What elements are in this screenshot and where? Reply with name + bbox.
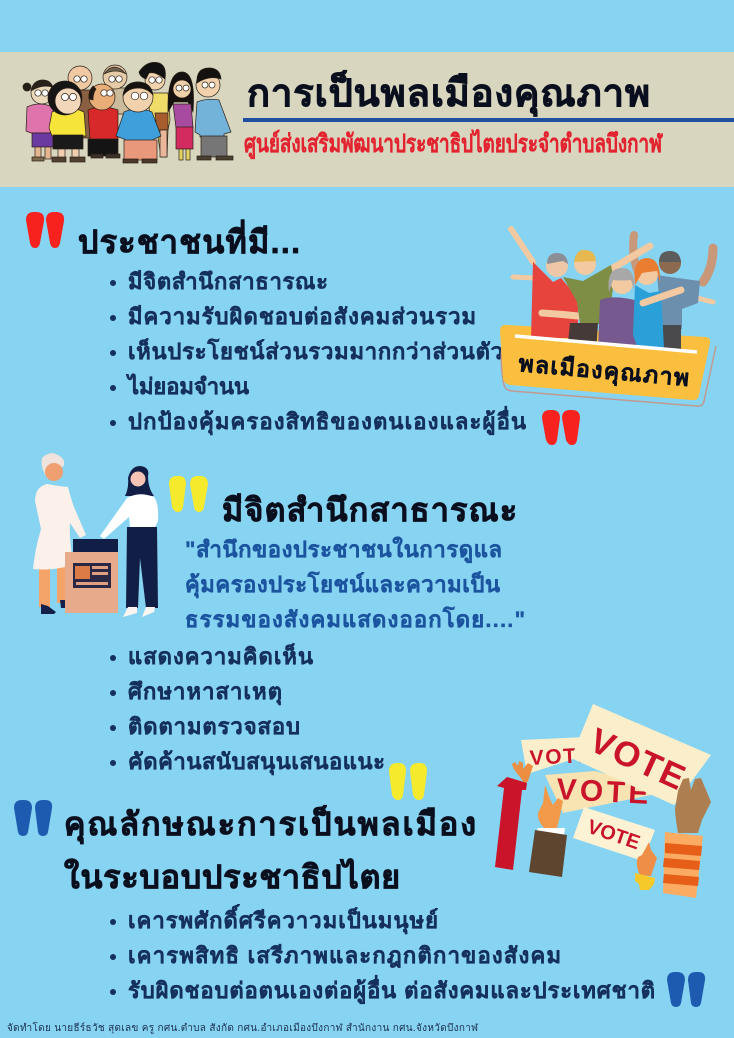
- sign lower cover: [502, 335, 697, 400]
- icon: yellow quote mark closing: [389, 763, 427, 800]
- middle back sign: [545, 771, 670, 813]
- list: expression: ติดตามตรวจสอบ: [128, 714, 300, 739]
- list: traits: เคารพศักดิ์ศรีควาวมเป็นมนุษย์: [128, 904, 438, 935]
- list: expression: คัดค้านสนับสนุนเสนอแนะ: [128, 749, 385, 776]
- icon: red quote mark top: [26, 212, 64, 248]
- left back sign: [521, 737, 586, 774]
- list: citizen qualities: ปกป้องคุ้มครองสิทธิของตนเองและผู้อื่น: [128, 405, 526, 436]
- icon: vote signs and hands: VOTE: [584, 721, 691, 798]
- title: การเป็นพลเมืองคุณภาพ: [247, 70, 650, 117]
- icon: vote signs and hands: VOTE: [556, 773, 649, 811]
- icon: vote signs and hands: VOTE: [584, 816, 643, 854]
- list: expression: [110, 642, 385, 776]
- list: citizen qualities: มีจิตสำนึกสาธารณะ: [128, 269, 328, 294]
- quote text: ธรรมของสังคมแสดงออกโดย....": [185, 606, 525, 632]
- header banner: [0, 52, 734, 187]
- heading: public consciousness: มีจิตสำนึกสาธารณะ: [222, 492, 517, 528]
- list: citizen qualities: ไม่ยอมจำนน: [126, 373, 249, 399]
- blue rule: [243, 118, 734, 122]
- small sign: [573, 807, 655, 861]
- heading: democratic citizenship traits: [64, 804, 476, 895]
- sign outline: [501, 328, 716, 406]
- back row: [70, 90, 94, 138]
- quote text: คุ้มครองประโยชน์และความเป็น: [185, 570, 500, 599]
- icon: blue quote mark closing: [667, 972, 705, 1007]
- heading: democratic citizenship traits: คุณลักษณะการเป็นพลเมือง: [64, 804, 476, 845]
- blue man: [116, 109, 161, 141]
- people: [633, 235, 638, 273]
- list: expression: ศึกษาหาสาเหตุ: [128, 679, 282, 706]
- icon: vote signs and hands: VOTE: [529, 744, 592, 770]
- heading: citizens who have: ประชาชนที่มี...: [78, 219, 300, 260]
- big brown hand: [675, 778, 711, 833]
- sign text: พลเมืองคุณภาพ: [517, 350, 690, 393]
- list: traits: เคารพสิทธิ เสรีภาพและกฎกติกาของสังคม: [128, 943, 561, 968]
- list: citizen qualities: เห็นประโยชน์ส่วนรวมมากกว่าส่วนตัว: [128, 337, 503, 364]
- list: traits: รับผิดชอบต่อตนเองต่อผู้อื่น ต่อสังคมและประเทศชาติ: [128, 974, 655, 1005]
- list: expression: แสดงความคิดเห็น: [128, 642, 313, 669]
- icon: cheering citizens with sign: [500, 229, 716, 406]
- footer credit: จัดทำโดย นายธีร์ธวัช สุดเลข ครู กศน.ตำบล สังกัด กศน.อำเภอเมืองบึงกาฬ สำนักงาน กศน.จังหวัดบึงกาฬ: [7, 1021, 479, 1034]
- bald man: [88, 107, 118, 140]
- icon: red quote mark bottom of list: [542, 410, 580, 445]
- red sleeve arm: [512, 761, 533, 784]
- list: citizen qualities: มีความรับผิดชอบต่อสังคมส่วนรวม: [128, 304, 476, 329]
- icon: blue quote mark: [14, 800, 52, 836]
- brown sleeve arm: [538, 785, 563, 828]
- icon: vote signs and hands: [495, 704, 711, 898]
- striped sleeve: [663, 832, 703, 898]
- heading: democratic citizenship traits: ในระบอบประชาธิปไตย: [64, 858, 400, 895]
- icon: yellow quote mark: [169, 476, 208, 512]
- list: citizen qualities: [110, 269, 526, 436]
- icon: two women at ballot box: [33, 453, 158, 617]
- eyes: [35, 76, 215, 101]
- icon: group of cartoon citizens: [23, 62, 233, 163]
- list: traits: [110, 904, 655, 1005]
- quote text: [185, 536, 525, 632]
- pink woman: [168, 72, 194, 112]
- blue-shirt man: [195, 99, 231, 137]
- left woman: [23, 83, 31, 91]
- sign body: [500, 325, 710, 400]
- quote text: "สำนึกของประชาชนในการดูแล: [185, 536, 502, 564]
- yellow woman: [49, 108, 86, 136]
- small hand: [637, 842, 657, 876]
- big sign: [571, 704, 711, 805]
